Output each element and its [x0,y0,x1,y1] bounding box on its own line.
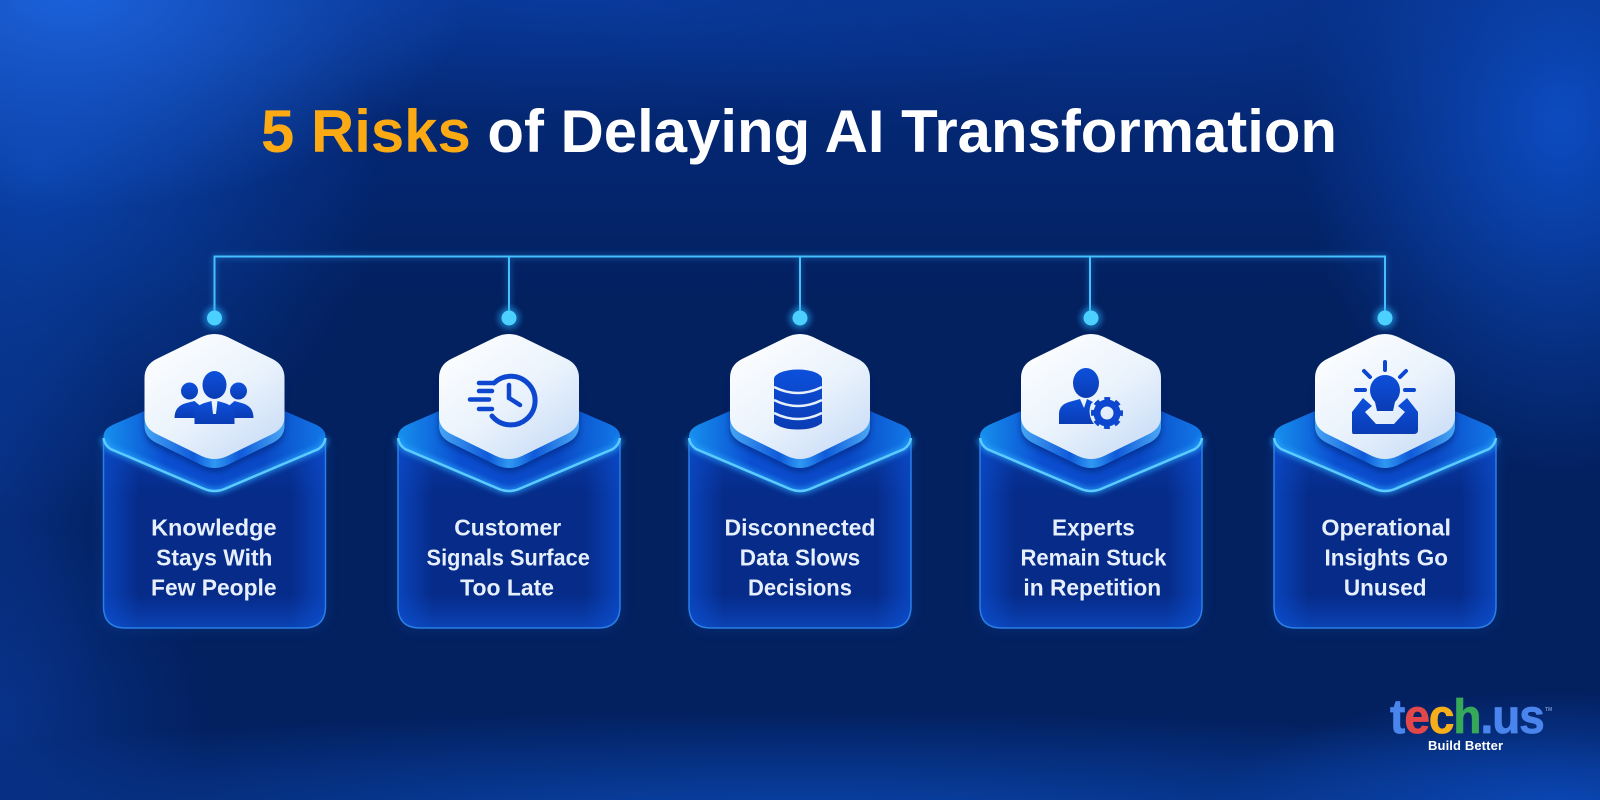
card 4: experts [980,307,1202,628]
label [724,514,876,600]
card 3: data [689,307,911,628]
label: Customer [454,514,561,540]
label [1020,514,1167,600]
label [1321,514,1451,600]
label: Stays With [156,544,272,570]
panel [103,384,326,628]
label [427,514,590,600]
icon: lightbulb in tray [1352,362,1418,434]
logo wordmark: tech.us [1390,690,1544,743]
icon: people [174,371,254,424]
label: Data Slows [740,544,860,570]
connector dot [204,307,226,329]
title: 5 Risks of Delaying AI Transformation [261,98,1337,165]
label: in Repetition [1023,574,1161,600]
connector dot [789,307,811,329]
label: Insights Go [1324,544,1448,570]
card 5: insights [1274,307,1496,628]
label: Too Late [460,574,554,600]
trademark: TM [1545,707,1552,713]
label: Few People [151,574,277,600]
label: Experts [1052,514,1135,540]
logo [1390,690,1552,753]
card 1: knowledge [103,307,326,628]
label: Disconnected [724,514,876,540]
hexagon badge [730,334,870,472]
panel [689,384,911,628]
label: Knowledge [151,514,277,540]
hexagon badge [144,334,284,472]
connector lines [214,256,1385,318]
label: Operational [1321,514,1451,540]
connector dot [1374,307,1396,329]
hexagon badge [439,334,579,472]
label: Remain Stuck [1020,544,1167,570]
card 2: customer [398,307,620,628]
connector dot [498,307,520,329]
logo tagline: Build Better [1428,738,1503,753]
hexagon badge [1021,334,1161,472]
icon: expert with gear [1059,368,1120,426]
icon: database [774,370,822,430]
label: Signals Surface [427,544,590,570]
hexagon badge [1315,334,1455,472]
label: Unused [1344,574,1427,600]
icon: clock [470,376,535,425]
label [151,514,277,600]
panel [398,384,620,628]
panel [980,384,1202,628]
connector dot [1080,307,1102,329]
label: Decisions [748,574,852,600]
panel [1274,384,1496,628]
